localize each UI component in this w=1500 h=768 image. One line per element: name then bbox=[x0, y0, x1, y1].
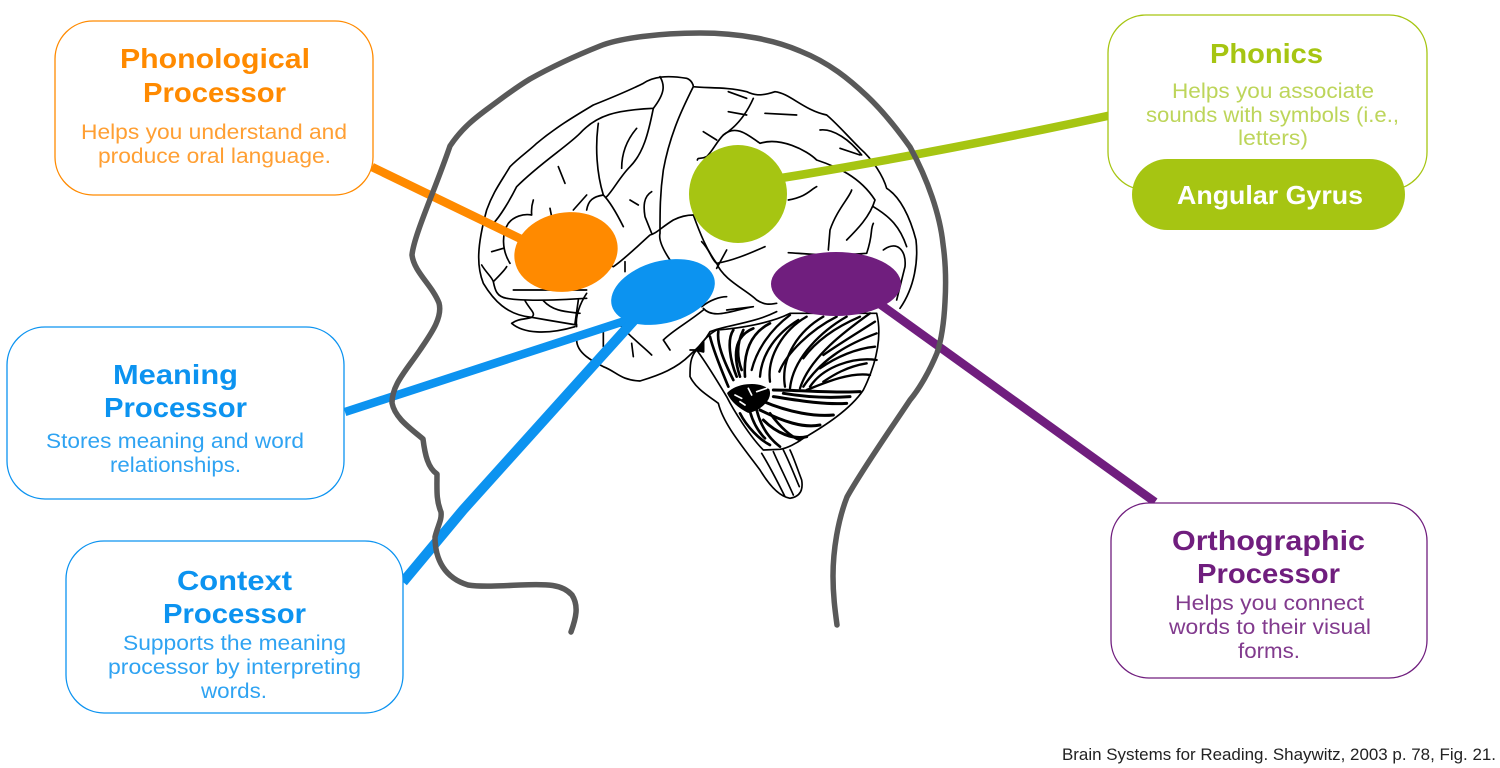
cerebellum and brain stem bbox=[690, 313, 879, 498]
panel: orthographic processor: Orthographic bbox=[1172, 525, 1365, 556]
label: angular gyrus pill: Angular Gyrus bbox=[1177, 180, 1363, 210]
panel: context processor: Processor bbox=[163, 598, 306, 629]
panel: phonological processor: Processor bbox=[143, 77, 286, 108]
panel: phonological processor: Helps you understand and bbox=[81, 121, 347, 144]
region: orange bbox=[508, 204, 624, 300]
panel: phonics: Phonics bbox=[1210, 38, 1323, 69]
connector: orthographic bbox=[870, 297, 1155, 502]
panel: phonological processor: produce oral language. bbox=[98, 145, 331, 168]
head outline bbox=[392, 33, 946, 632]
panel: meaning processor: Processor bbox=[104, 392, 247, 423]
panel: orthographic processor: Helps you connect bbox=[1175, 592, 1364, 615]
panel: phonics: letters) bbox=[1238, 127, 1308, 150]
panel: phonics: Helps you associate bbox=[1172, 80, 1374, 103]
panel: meaning processor: Meaning bbox=[113, 359, 238, 390]
connector: context bbox=[403, 308, 645, 582]
caption: citation: Brain Systems for Reading. Shaywitz, 2003 p. 78, Fig. 21. bbox=[1062, 745, 1496, 764]
region: purple bbox=[771, 252, 901, 316]
panel: context processor: processor by interpreting bbox=[108, 656, 361, 679]
panel: meaning processor: Stores meaning and word bbox=[46, 430, 304, 453]
panel: context processor: Context bbox=[177, 565, 292, 596]
label: angular gyrus pill bbox=[1132, 159, 1405, 230]
panel: context processor bbox=[66, 541, 403, 713]
panel: meaning processor: relationships. bbox=[110, 454, 241, 477]
panel: orthographic processor: forms. bbox=[1238, 640, 1300, 663]
panel: context processor: words. bbox=[200, 680, 267, 703]
brain illustration bbox=[479, 77, 917, 498]
region: green angular gyrus bbox=[689, 145, 787, 243]
panel: orthographic processor bbox=[1111, 503, 1427, 678]
panel: orthographic processor: words to their visual bbox=[1168, 616, 1371, 639]
connector: phonics bbox=[775, 115, 1112, 179]
panel: phonological processor: Phonological bbox=[120, 43, 310, 74]
panel: context processor: Supports the meaning bbox=[123, 632, 346, 655]
panel: phonics: sounds with symbols (i.e., bbox=[1146, 104, 1399, 127]
panel: phonics bbox=[1108, 15, 1427, 190]
region: blue bbox=[604, 248, 722, 336]
connector: phonological bbox=[372, 167, 525, 241]
panel: phonological processor bbox=[55, 21, 373, 195]
connector: meaning bbox=[345, 316, 640, 412]
panel: meaning processor bbox=[7, 327, 344, 499]
panel: orthographic processor: Processor bbox=[1197, 558, 1340, 589]
